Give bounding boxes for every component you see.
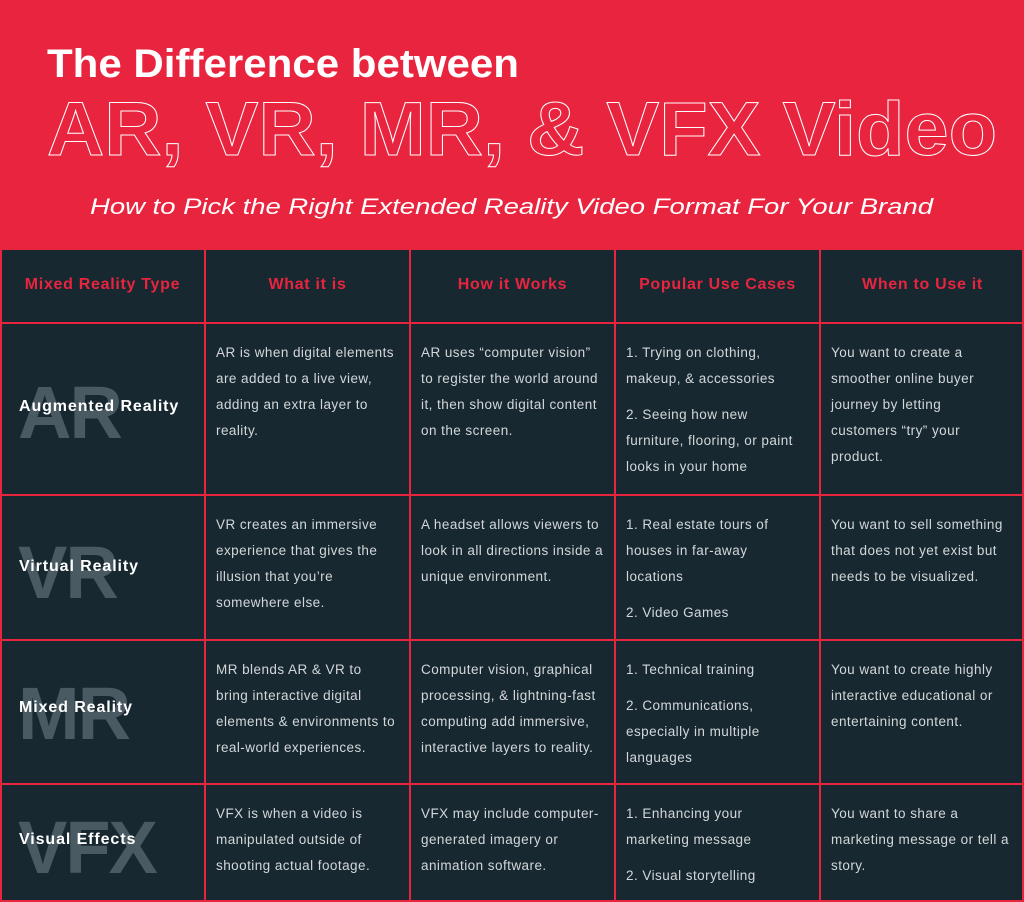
row: AR: AR uses “computer vision” [421,345,591,360]
row: AR: adding an extra layer to [216,397,368,412]
row: MR: MR [18,672,129,755]
row: VFX: generated imagery or [421,832,558,847]
subtitle: How to Pick the Right Extended Reality Video Format For Your Brand [90,194,934,219]
row: MR: computing add immersive, [421,714,589,729]
row: AR: customers “try” your [831,423,960,438]
row: VFX: marketing message [626,832,751,847]
row: VR: VR [18,531,117,614]
row: AR: it, then show digital content [421,397,597,412]
title outlined line: AR, VR, MR, & VFX Video [47,87,997,172]
row: MR [18,662,993,765]
row: VFX: animation software. [421,858,547,873]
row: MR: especially in multiple [626,724,760,739]
row: AR: smoother online buyer [831,371,974,386]
row: MR: entertaining content. [831,714,963,729]
row: VR [18,517,1003,620]
row: VR: experience that gives the [216,543,377,558]
row: VR: look in all directions inside a [421,543,603,558]
row: MR: 1. Technical training [626,662,755,677]
row: AR: reality. [216,423,258,438]
row: MR: bring interactive digital [216,688,362,703]
title line 1: The Difference between [47,42,519,86]
row: VR: 1. Real estate tours of [626,517,768,532]
row: VR: somewhere else. [216,595,325,610]
row: VR: illusion that you’re [216,569,333,584]
row: AR: on the screen. [421,423,513,438]
row: VR: unique environment. [421,569,552,584]
row: AR [18,345,974,474]
row: VR: needs to be visualized. [831,569,979,584]
row: AR: looks in your home [626,459,747,474]
header row: Mixed Reality Type [25,276,180,293]
row: VFX: You want to share a [831,806,958,821]
row: MR: processing, & lightning-fast [421,688,596,703]
row: AR: 2. Seeing how new [626,407,748,422]
row: VFX: shooting actual footage. [216,858,370,873]
row: AR: journey by letting [831,397,941,412]
row: AR: to register the world around [421,371,598,386]
row: VR: 2. Video Games [626,605,729,620]
row: VFX: 2. Visual storytelling [626,868,756,883]
header row [25,276,983,293]
row: VR: locations [626,569,683,584]
row: MR: elements & environments to [216,714,395,729]
row: MR: Mixed Reality [19,699,133,716]
row: AR: AR [18,371,121,454]
header row: What it is [268,276,347,293]
row: AR: are added to a live view, [216,371,372,386]
row: AR: furniture, flooring, or paint [626,433,793,448]
row: MR: You want to create highly [831,662,993,677]
row: VFX: 1. Enhancing your [626,806,742,821]
row: VFX: manipulated outside of [216,832,362,847]
row: VFX: VFX is when a video is [216,806,362,821]
row: VR: VR creates an immersive [216,517,377,532]
row: VR: houses in far-away [626,543,747,558]
row: VFX [18,806,1009,889]
row: VFX: story. [831,858,866,873]
row: AR: makeup, & accessories [626,371,775,386]
row: AR: 1. Trying on clothing, [626,345,760,360]
row: MR: MR blends AR & VR to [216,662,362,677]
header row: Popular Use Cases [639,276,796,293]
row: MR: languages [626,750,692,765]
row: VFX: Visual Effects [19,831,136,848]
row: VFX: VFX may include computer- [421,806,599,821]
row: VR: Virtual Reality [19,558,139,575]
header banner [0,0,1024,250]
row: VFX: marketing message or tell a [831,832,1009,847]
row: AR: AR is when digital elements [216,345,394,360]
row: AR: product. [831,449,883,464]
row: MR: real-world experiences. [216,740,366,755]
row: MR: Computer vision, graphical [421,662,593,677]
row: AR: You want to create a [831,345,963,360]
header row: When to Use it [862,276,983,293]
row: VR: that does not yet exist but [831,543,997,558]
row: VR: You want to sell something [831,517,1003,532]
row: MR: 2. Communications, [626,698,753,713]
row: MR: interactive layers to reality. [421,740,593,755]
row: AR: Augmented Reality [19,398,179,415]
row: VFX: VFX [18,806,156,889]
row: VR: A headset allows viewers to [421,517,599,532]
comparison table [0,250,1024,902]
row: MR: interactive educational or [831,688,993,703]
header row: How it Works [458,276,567,293]
